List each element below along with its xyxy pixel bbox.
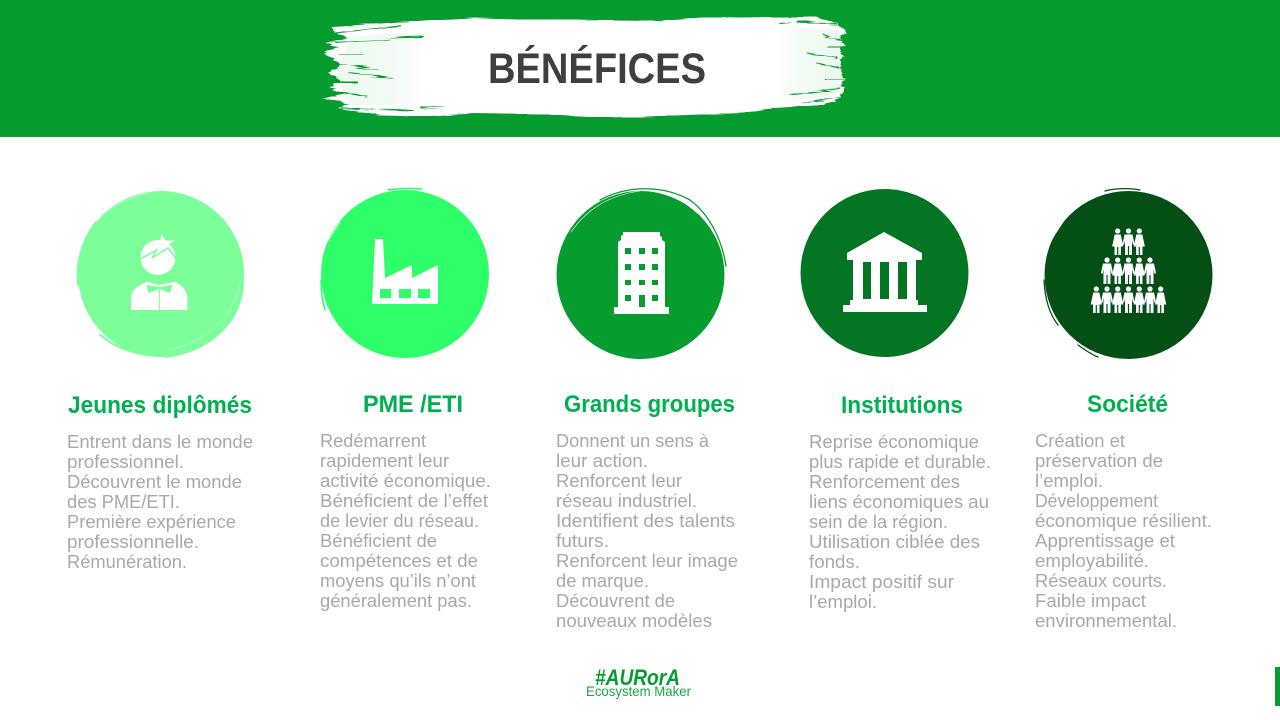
circle badge: bright green [321,188,489,358]
text block: Première expérience [67,512,236,532]
circle badge: darkest green [1044,189,1212,359]
footer logo: Ecosystem Maker [586,683,691,699]
text block: nouveaux modèles [556,611,712,631]
heading: Institutions [841,392,963,419]
heading: Société [1087,391,1168,418]
text block: l’emploi. [1035,471,1103,491]
footer logo [586,665,691,699]
text block: Bénéficient de [320,531,437,551]
text block: Apprentissage et [1035,531,1175,551]
text block: Réseaux courts. [1035,571,1167,591]
text block: professionnelle. [67,532,199,552]
text block: Renforcent leur [556,471,682,491]
text block: fonds. [809,552,860,572]
panel: Jeunes diplômés [67,191,253,572]
heading: PME /ETI [363,391,463,418]
text block: économique résilient. [1035,511,1212,531]
text block: généralement pas. [320,591,472,611]
text block: rapidement leur [320,451,449,471]
heading: Grands groupes [564,391,735,418]
page edge marker [1275,667,1280,706]
text block: liens économiques au [809,492,989,512]
text block: Redémarrent [320,431,426,451]
text block: Reprise économique [809,432,979,452]
text block [1035,431,1212,631]
text block [67,432,253,572]
text block: préservation de [1035,451,1163,471]
text block [320,431,491,611]
text block: Découvrent de [556,591,675,611]
text block: activité économique. [320,471,491,491]
icon: institution building [843,232,927,312]
text block: Renforcement des [809,472,960,492]
text block: plus rapide et durable. [809,452,991,472]
icon: young graduate [131,234,187,310]
text block: Découvrent le monde [67,472,242,492]
icon: factory [372,239,438,304]
text block: Entrent dans le monde [67,432,253,452]
text block: Création et [1035,431,1125,451]
text block: Utilisation ciblée des [809,532,980,552]
text block: moyens qu’ils n’ont [320,571,476,591]
panel: Grands groupes [556,189,738,631]
text block: Faible impact [1035,591,1146,611]
text block: réseau industriel. [556,491,697,511]
text block: employabilité. [1035,551,1149,571]
text block: Impact positif sur [809,572,954,592]
circle badge: light green [78,191,244,357]
circle badge: dark green [800,189,968,357]
title: BÉNÉFICES [488,45,706,93]
text block: Donnent un sens à [556,431,710,451]
icon: group of people pyramid [1091,228,1166,313]
text block: Bénéficient de l’effet [320,491,488,511]
text block: professionnel. [67,452,184,472]
text block: de marque. [556,571,649,591]
text block: Renforcent leur image [556,551,738,571]
title brush stroke [323,17,847,117]
text block: leur action. [556,451,648,471]
text block: l’emploi. [809,592,877,612]
text block: Identifient des talents [556,511,735,531]
panel: Société [1035,189,1212,631]
footer logo: #AURorA [595,665,680,690]
text block [809,432,991,612]
text block: Développement [1035,491,1158,511]
text block: des PME/ETI. [67,492,180,512]
text block: environnemental. [1035,611,1177,631]
circle badge: medium green [556,189,726,359]
text block: compétences et de [320,551,478,571]
text block: de levier du réseau. [320,511,479,531]
text block: Rémunération. [67,552,187,572]
heading: Jeunes diplômés [68,392,252,419]
panel: Institutions [800,189,991,612]
panel: PME /ETI [320,188,491,611]
text block: sein de la région. [809,512,948,532]
icon: office building [614,232,669,314]
text block: futurs. [556,531,609,551]
header band [0,0,1280,137]
text block [556,431,738,631]
